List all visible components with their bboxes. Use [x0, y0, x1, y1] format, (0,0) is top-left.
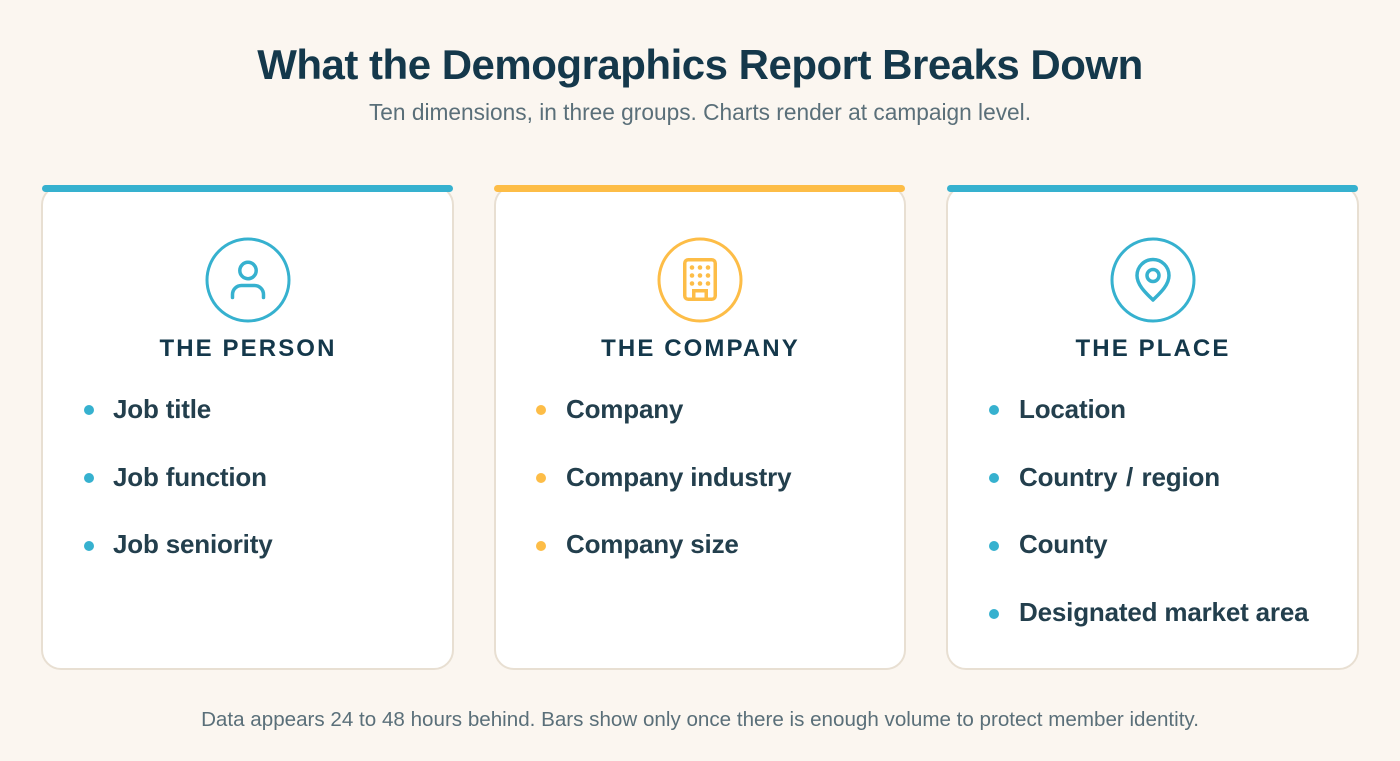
bullet [989, 609, 999, 619]
item: Company size [566, 529, 739, 559]
bullet [989, 541, 999, 551]
footnote: Data appears 24 to 48 hours behind. Bars show only once there is enough volume to protect member identity. [201, 708, 1199, 731]
heading: the place: THE PLACE [1076, 335, 1230, 362]
accent bar [42, 185, 453, 192]
bullet [84, 405, 94, 415]
item: Company industry [566, 462, 791, 492]
bullet [84, 541, 94, 551]
title: What the Demographics Report Breaks Down [257, 41, 1143, 88]
item: Designated market area [1019, 597, 1308, 627]
item: County [1019, 529, 1107, 559]
item: Location [1019, 394, 1126, 424]
bullet [536, 473, 546, 483]
item: Company [566, 394, 683, 424]
icon: person [206, 238, 290, 322]
accent bar [494, 185, 905, 192]
card background [41, 185, 454, 670]
panel: the place [946, 185, 1359, 670]
list: place dimensions [989, 394, 1309, 627]
heading: the person: THE PERSON [159, 335, 337, 362]
bullet [989, 405, 999, 415]
item: Job seniority [113, 529, 272, 559]
subtitle: Ten dimensions, in three groups. Charts render at campaign level. [369, 99, 1031, 125]
bullet [989, 473, 999, 483]
item: Job title [113, 394, 211, 424]
heading: the company: THE COMPANY [601, 335, 800, 362]
panel: the person [41, 185, 454, 670]
bullet [536, 541, 546, 551]
icon: building [658, 238, 742, 322]
card background [946, 185, 1359, 670]
list: company dimensions [536, 394, 792, 559]
bullet [84, 473, 94, 483]
card background [494, 185, 906, 670]
bullet [536, 405, 546, 415]
item: Job function [113, 462, 267, 492]
list: person dimensions [84, 394, 272, 559]
icon: map pin [1110, 238, 1196, 322]
accent bar [947, 185, 1358, 192]
panel: the company [494, 185, 906, 670]
item: Country / region [1019, 462, 1220, 492]
